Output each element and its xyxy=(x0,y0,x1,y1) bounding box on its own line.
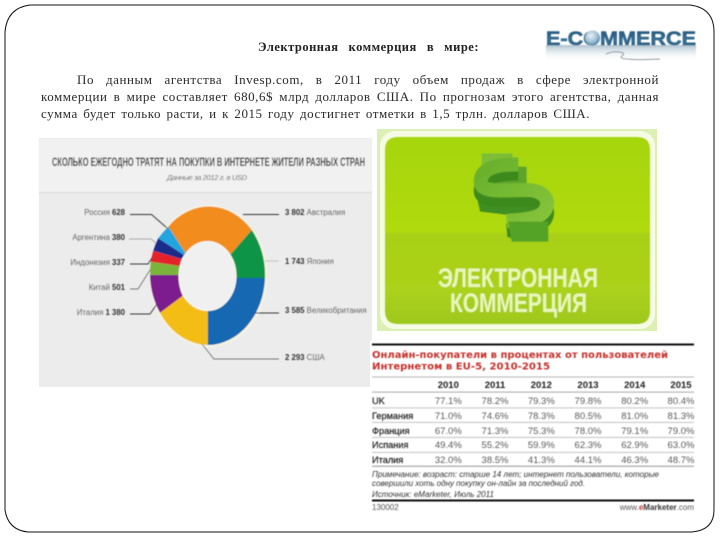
table header row: 2012 xyxy=(531,380,552,391)
table footer: www.eMarketer.com xyxy=(619,503,694,512)
chart background xyxy=(39,138,372,387)
table values: 48.7% xyxy=(668,455,695,466)
table heading: Интернетом в EU-5, 2010-2015 xyxy=(372,362,550,372)
table footer xyxy=(372,503,694,512)
table values: 78.0% xyxy=(575,426,602,437)
table values: 79.0% xyxy=(668,426,695,437)
table notes: совершили хоть одну покупку он-лайн за последний год. xyxy=(372,479,585,488)
table values: 80.2% xyxy=(621,396,649,407)
table header row xyxy=(438,380,692,391)
table values: 79.3% xyxy=(528,396,555,407)
donut xyxy=(150,205,268,347)
table row labels: Италия xyxy=(372,455,403,465)
table values: 75.3% xyxy=(528,426,555,437)
table row labels: Германия xyxy=(372,411,413,421)
table row labels xyxy=(372,396,413,465)
icon: cable xyxy=(606,52,660,60)
table values: 71.0% xyxy=(435,411,462,422)
icon: dollar sign xyxy=(477,153,548,242)
table values: 79.8% xyxy=(575,396,602,407)
table row labels: Франция xyxy=(372,426,410,436)
panel: donut chart xyxy=(39,138,372,387)
title: Электронная коммерция в мире: xyxy=(258,40,479,54)
table values: 59.9% xyxy=(528,440,555,451)
banner green lower xyxy=(385,233,650,324)
chart labels right: 2 293 США xyxy=(285,353,325,362)
body text: сумма будет только расти, и к 2015 году достигнет отметки в 1,5 трлн. долларов США. xyxy=(41,106,590,121)
table values: 80.4% xyxy=(668,396,695,407)
table notes xyxy=(372,470,660,499)
table header row: 2011 xyxy=(485,380,506,391)
table notes: Примечание: возраст: старше 14 лет; интернет пользователи, которые xyxy=(372,470,660,479)
logo wordmark: E-COMMERCE xyxy=(546,28,696,50)
table values: 81.0% xyxy=(621,411,649,422)
table values: 79.1% xyxy=(621,426,649,437)
chart labels right: 3 585 Великобритания xyxy=(285,306,367,315)
logo reflection xyxy=(546,45,696,61)
logo: E-Commerce xyxy=(546,28,696,61)
table values: 80.5% xyxy=(575,411,602,422)
banner caption xyxy=(438,263,598,318)
banner green upper xyxy=(385,137,650,233)
chart labels left: Индонезия 337 xyxy=(70,258,125,267)
table heading xyxy=(372,350,668,372)
table values: 46.3% xyxy=(621,455,649,466)
table values: 62.9% xyxy=(621,440,649,451)
table footer: 130002 xyxy=(372,503,399,512)
banner caption: КОММЕРЦИЯ xyxy=(450,288,587,318)
table values: 44.1% xyxy=(575,455,602,466)
table values: 63.0% xyxy=(668,440,695,451)
table header row: 2015 xyxy=(670,380,692,391)
table row labels: UK xyxy=(372,396,386,406)
chart labels right: 3 802 Австралия xyxy=(285,208,345,217)
chart labels left: Аргентина 380 xyxy=(72,233,126,242)
table values: 74.6% xyxy=(482,411,509,422)
table values: 41.3% xyxy=(528,455,555,466)
table rules xyxy=(372,376,694,467)
icon: globe xyxy=(585,30,600,46)
chart header band xyxy=(39,139,372,192)
chart labels right: 1 743 Япония xyxy=(285,257,334,266)
table header row: 2014 xyxy=(624,380,646,391)
body text xyxy=(41,72,659,121)
table values: 78.2% xyxy=(482,396,509,407)
body text: коммерции в мире составляет 680,6$ млрд долларов США. По прогнозам этого агентства, данная xyxy=(41,89,659,104)
table values xyxy=(435,396,695,466)
panel: online buyers table xyxy=(370,340,698,515)
table values: 62.3% xyxy=(575,440,602,451)
chart subheading: Данные за 2012 г. в USD xyxy=(166,173,248,182)
chart heading: СКОЛЬКО ЕЖЕГОДНО ТРАТЯТ НА ПОКУПКИ В ИНТЕРНЕТЕ ЖИТЕЛИ РАЗНЫХ СТРАН xyxy=(52,157,365,169)
chart labels left: Россия 628 xyxy=(84,208,126,217)
chart labels left xyxy=(70,208,126,317)
chart labels right xyxy=(285,208,367,362)
table values: 49.4% xyxy=(435,440,462,451)
chart labels left: Италия 1 380 xyxy=(77,308,126,317)
leader lines xyxy=(129,214,279,359)
panel: green e-commerce banner xyxy=(377,129,657,331)
table values: 67.0% xyxy=(435,426,462,437)
table values: 32.0% xyxy=(435,455,462,466)
table values: 38.5% xyxy=(482,455,509,466)
table notes: Источник: eMarketer, Июль 2011 xyxy=(372,490,494,499)
body text: По данным агентства Invesp.com, в 2011 году объем продаж в сфере электронной xyxy=(77,72,659,87)
table header row: 2010 xyxy=(438,380,459,391)
table values: 77.1% xyxy=(435,396,462,407)
table row labels: Испания xyxy=(372,440,408,450)
table values: 55.2% xyxy=(482,440,509,451)
table heading: Онлайн-покупатели в процентах от пользователей xyxy=(372,350,668,361)
chart labels left: Китай 501 xyxy=(89,283,126,292)
table values: 71.3% xyxy=(482,426,509,437)
table values: 78.3% xyxy=(528,411,555,422)
banner caption: ЭЛЕКТРОННАЯ xyxy=(438,263,598,293)
table values: 81.3% xyxy=(668,411,695,422)
table header row: 2013 xyxy=(577,380,599,391)
